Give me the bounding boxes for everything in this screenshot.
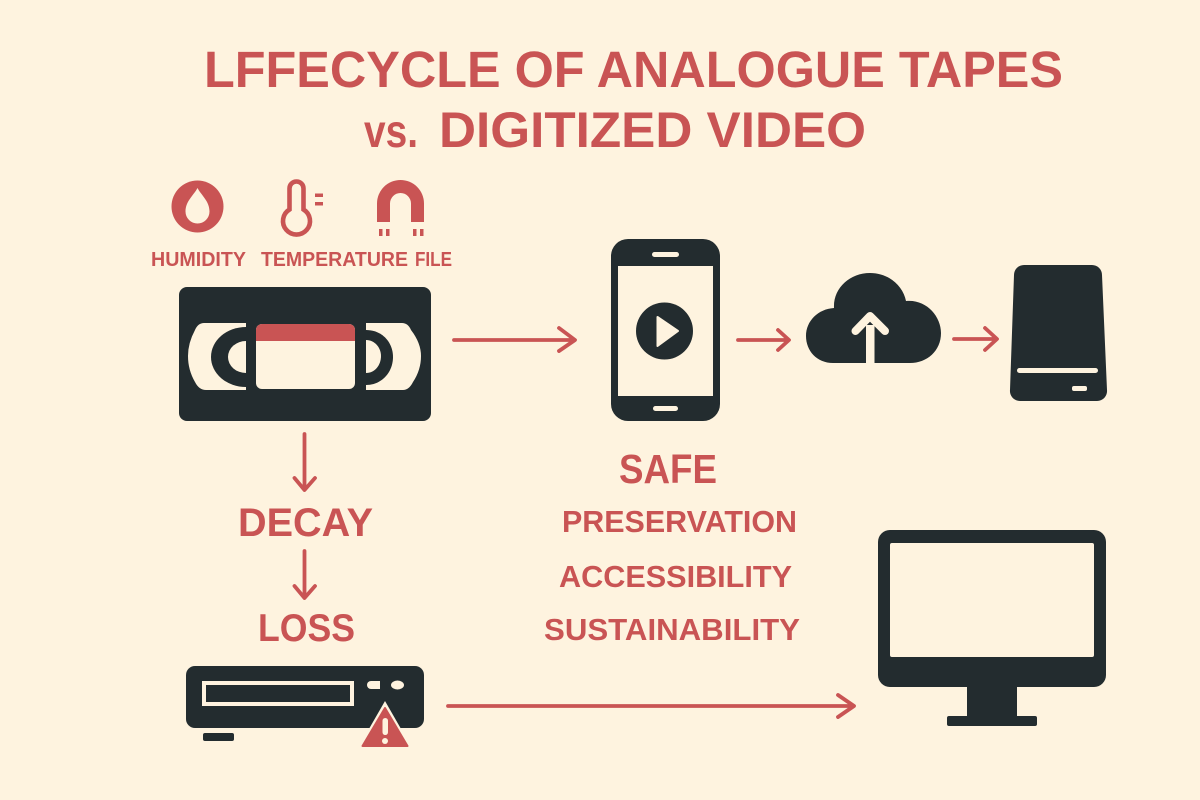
icon: monitor: [878, 530, 1106, 726]
arrow: cassette to decay: [294, 434, 315, 490]
icon: phone with play button: [611, 239, 720, 421]
temperature label: TEMPERATURE: [261, 249, 408, 271]
title: DIGITIZED VIDEO: [439, 102, 866, 158]
title: [204, 41, 1063, 158]
arrow: VCR to monitor: [448, 695, 854, 717]
arrow: phone to cloud: [738, 330, 789, 350]
arrow: cloud to drive: [954, 328, 997, 350]
title: LFFECYCLE OF ANALOGUE TAPES: [204, 41, 1063, 98]
icon: humidity: [172, 180, 224, 232]
icon: cloud upload: [806, 273, 941, 364]
icon: VHS cassette: [179, 287, 431, 421]
icon: temperature: [283, 182, 323, 235]
safe label: SAFE: [619, 446, 717, 492]
icon: external drive: [1010, 265, 1107, 401]
file label: FILE: [415, 249, 452, 271]
humidity label: HUMIDITY: [151, 249, 247, 271]
preservation label: PRESERVATION: [562, 504, 797, 539]
loss label: LOSS: [258, 607, 355, 650]
sustainability label: SUSTAINABILITY: [544, 612, 800, 647]
icon: VCR with warning: [186, 666, 424, 748]
accessibility label: ACCESSIBILITY: [559, 559, 792, 594]
icon: magnet: [377, 180, 424, 236]
arrow: decay to loss: [294, 551, 315, 598]
arrow: cassette to phone: [454, 328, 575, 351]
title: vs.: [364, 105, 418, 157]
decay label: DECAY: [238, 501, 373, 545]
